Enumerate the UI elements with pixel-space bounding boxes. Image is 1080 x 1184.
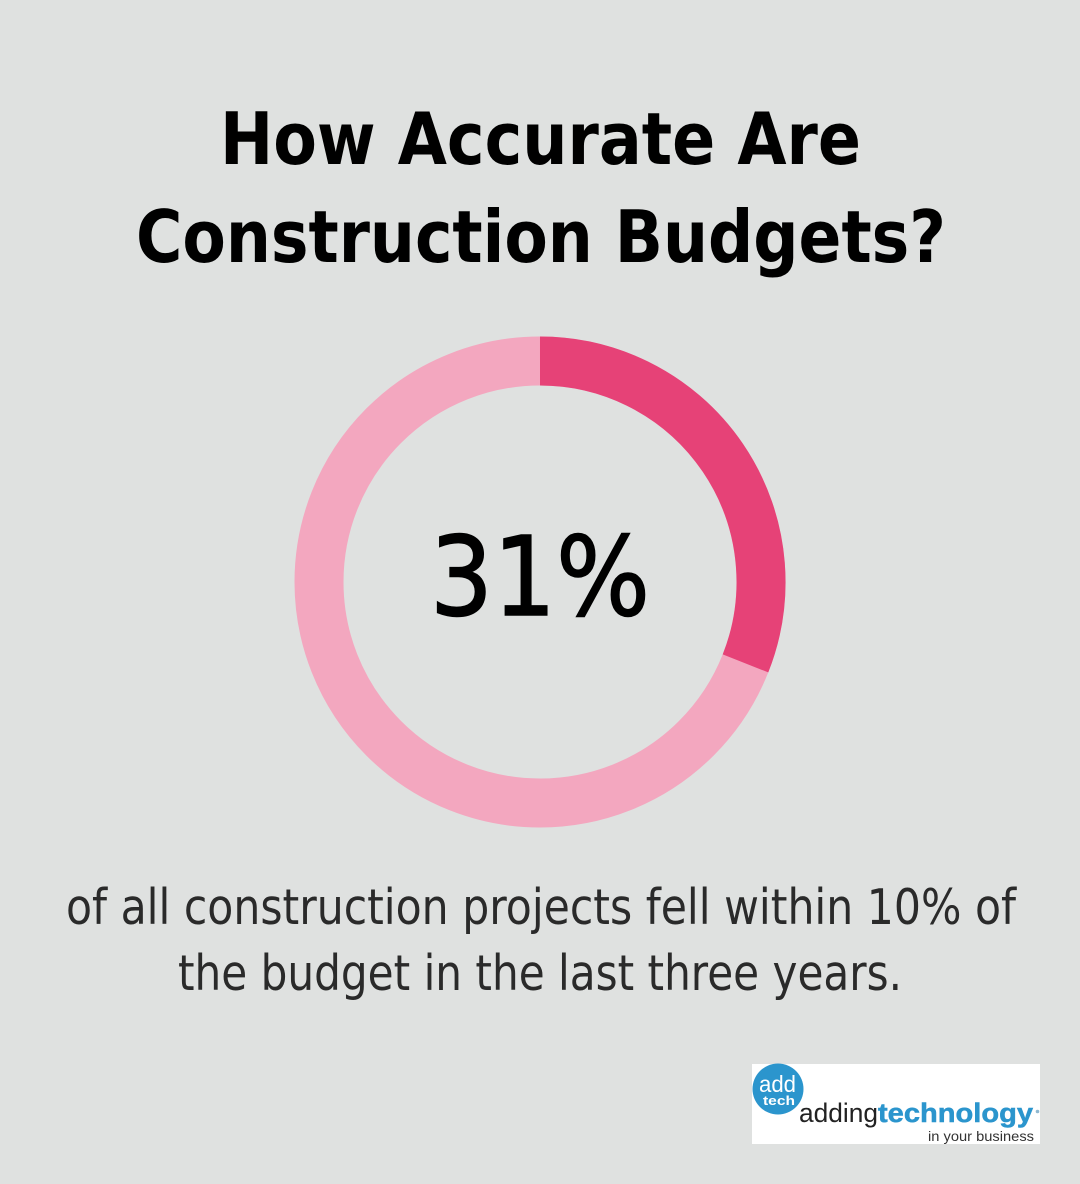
logo registered mark xyxy=(1036,1110,1039,1113)
logo background xyxy=(752,1064,1040,1144)
logo wordmark: adding xyxy=(799,1098,878,1128)
logo circle badge xyxy=(752,1064,804,1114)
donut track xyxy=(319,361,761,803)
description text: the budget in the last three years. xyxy=(178,945,902,1002)
logo: adding technology xyxy=(752,1064,1040,1144)
logo tagline: in your business xyxy=(928,1128,1034,1144)
big percentage: 31% xyxy=(430,513,650,641)
badge text: add: add xyxy=(759,1071,796,1097)
title: How Accurate Are xyxy=(220,97,861,181)
title xyxy=(136,97,946,279)
title: Construction Budgets? xyxy=(136,195,946,279)
donut highlighted segment xyxy=(540,361,761,663)
badge text: tech: tech xyxy=(763,1093,795,1108)
description text xyxy=(66,879,1018,1002)
donut chart: 31% xyxy=(319,361,761,803)
logo wordmark bold: technology xyxy=(878,1098,1033,1128)
